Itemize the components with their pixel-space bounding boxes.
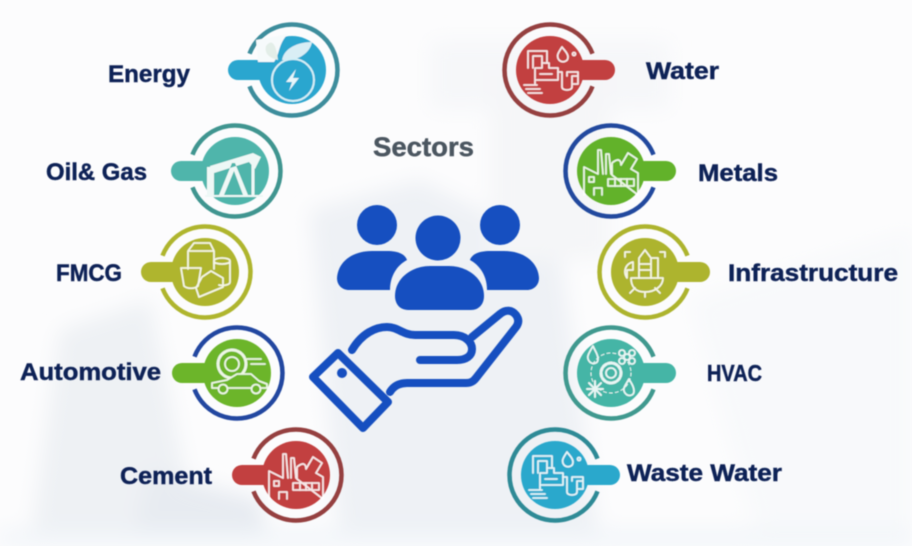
- people: [337, 205, 539, 310]
- icon: Infrastructure badge: [600, 226, 710, 318]
- sector: Water: [505, 24, 719, 116]
- hand: [313, 311, 518, 428]
- sector: Oil & Gas: [46, 126, 280, 216]
- label: HVAC: HVAC: [707, 360, 762, 386]
- sector: Energy: [108, 24, 337, 116]
- label: Energy: Energy: [108, 61, 191, 88]
- sector: Metals: [566, 126, 778, 216]
- icon: people group in hand: [313, 205, 539, 428]
- icon: Water badge: [505, 24, 615, 116]
- label: Cement: Cement: [120, 463, 212, 490]
- sector: Automotive: [20, 328, 282, 418]
- icon: Metals badge: [566, 126, 676, 216]
- icon: Waste Water badge: [510, 430, 620, 520]
- label: Infrastructure: Infrastructure: [728, 260, 898, 287]
- icon: Oil & Gas badge: [171, 126, 280, 216]
- icon: HVAC badge: [566, 328, 676, 418]
- sector: HVAC: [566, 328, 762, 418]
- heading: Sectors: Sectors: [373, 132, 474, 162]
- label: Automotive: Automotive: [20, 359, 161, 386]
- sector: Waste Water: [510, 430, 782, 520]
- sector: Infrastructure: [600, 226, 898, 318]
- sector: Cement: [120, 430, 341, 520]
- icon: Cement badge: [232, 430, 341, 520]
- icon: Energy badge: [228, 24, 337, 116]
- label: Oil& Gas: Oil& Gas: [46, 159, 147, 186]
- label: Waste Water: Waste Water: [627, 460, 782, 487]
- sector: FMCG: [56, 226, 250, 318]
- label: FMCG: FMCG: [56, 260, 122, 287]
- label: Metals: Metals: [698, 160, 778, 187]
- icon: FMCG badge: [141, 226, 250, 318]
- icon: Automotive badge: [172, 328, 282, 418]
- label: Water: Water: [646, 58, 719, 85]
